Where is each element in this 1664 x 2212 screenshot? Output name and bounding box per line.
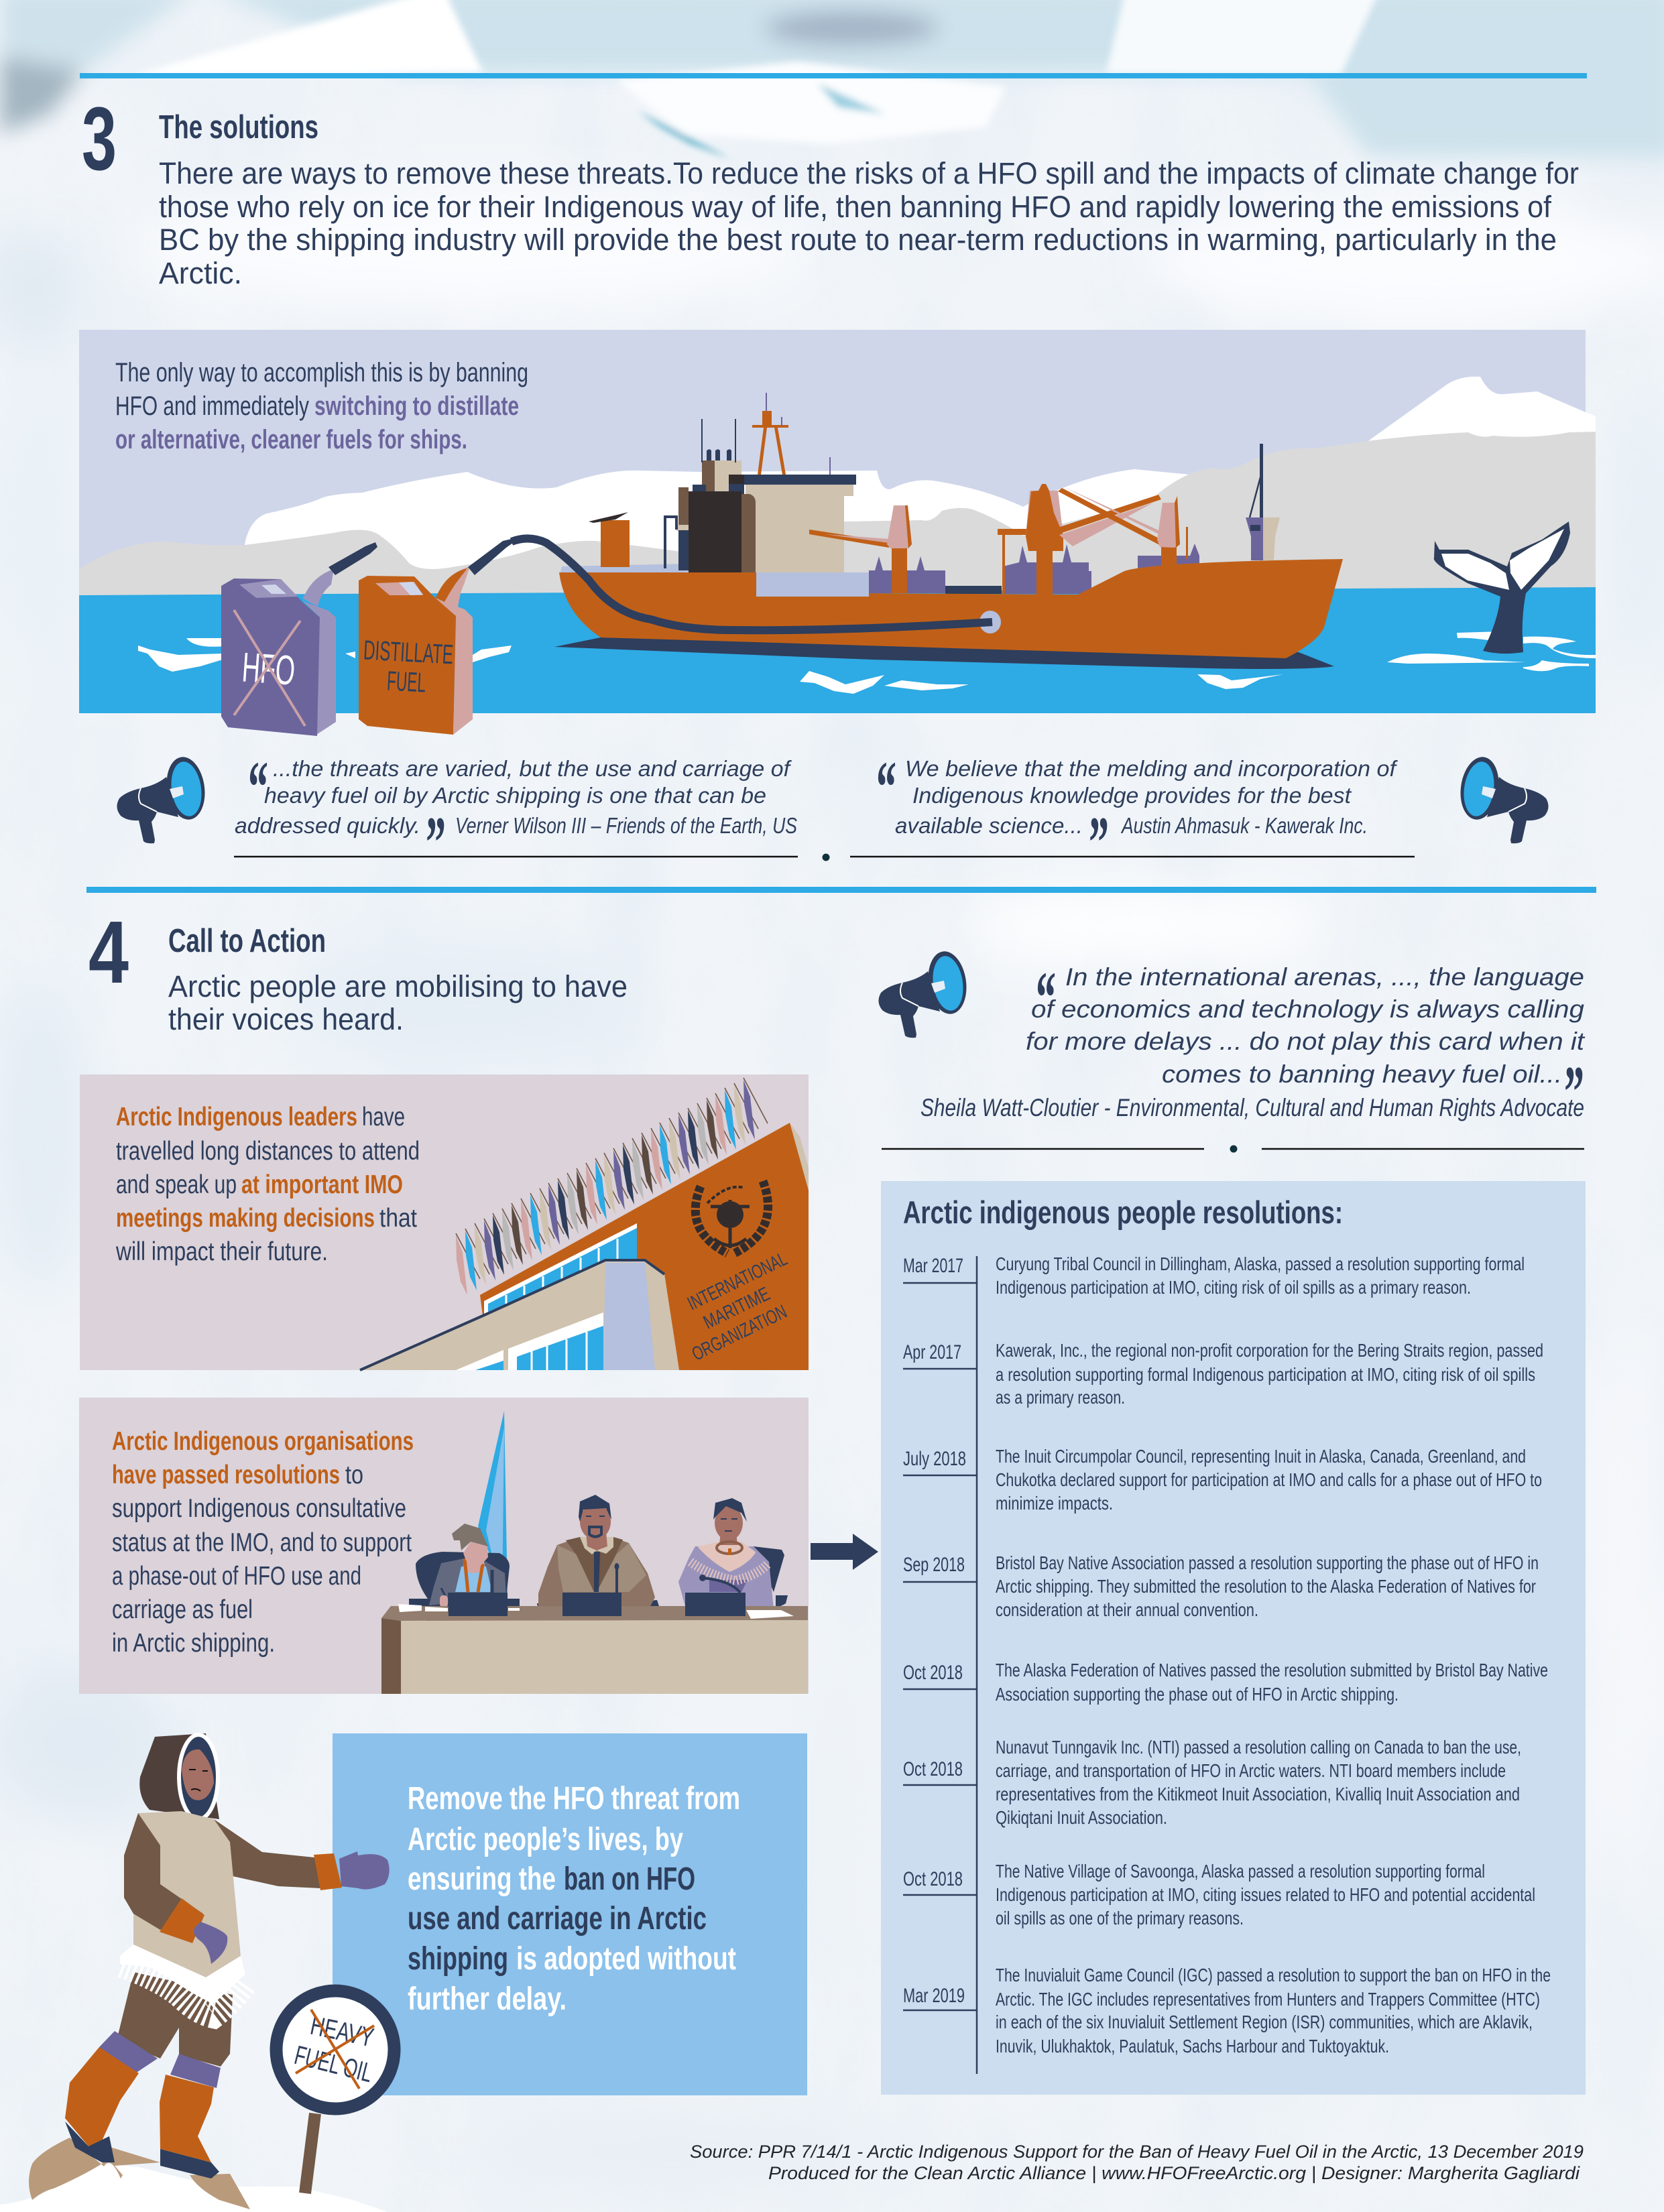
panel: Arctic indigenous people resolutions <box>881 1181 1586 2095</box>
icon: megaphone <box>117 755 209 843</box>
callout text <box>408 1781 740 2017</box>
cargo deck <box>869 570 945 593</box>
icon: megaphone <box>1457 755 1549 843</box>
timeline entries: minimize impacts. <box>996 1493 1113 1514</box>
quote 2 text: Austin Ahmasuk - Kawerak Inc. <box>1120 813 1368 838</box>
right arm <box>214 1819 320 1888</box>
quote 1 text: ” <box>426 802 446 883</box>
woman left <box>409 1524 520 1607</box>
panel: call to action callout <box>333 1733 807 2095</box>
quote 3 text: for more delays ... do not play this card when it <box>1026 1028 1586 1055</box>
quote 3 text: comes to banning heavy fuel oil... <box>1162 1060 1562 1088</box>
IMO panel text: Arctic Indigenous leaders <box>116 1103 357 1131</box>
callout text: ensuring the <box>408 1861 556 1897</box>
jerry can: HFO: HFO <box>241 644 296 694</box>
section 3 intro paragraph <box>159 156 1579 290</box>
mast <box>752 411 788 475</box>
resolutions panel text: status at the IMO, and to support <box>112 1528 412 1557</box>
microphone desks <box>448 1593 746 1616</box>
resolutions panel text: a phase-out of HFO use and <box>112 1562 361 1591</box>
section 3 intro paragraph: Arctic. <box>159 256 242 290</box>
callout text: use and carriage in Arctic <box>408 1901 707 1937</box>
callout text: shipping <box>408 1941 508 1977</box>
meeting illustration <box>381 1411 808 1694</box>
quote 3 text: of economics and technology is always calling <box>1031 995 1584 1023</box>
section 4 intro <box>168 969 628 1036</box>
resolutions panel text: support Indigenous consultative <box>112 1494 406 1523</box>
snow mountains <box>245 469 1220 576</box>
quote 1 text: Verner Wilson III – Friends of the Earth, US <box>455 813 797 838</box>
section 3 intro paragraph: BC by the shipping industry will provide the best route to near-term reductions in warming, particularly in the <box>159 223 1557 257</box>
IMO wordmark <box>685 1248 790 1365</box>
quote 1 text: ...the threats are varied, but the use and carriage of <box>273 756 792 781</box>
upper windows <box>484 1223 637 1314</box>
section 3 intro paragraph: those who rely on ice for their Indigenous way of life, then banning HFO and rapidly lowering the emissions of <box>159 190 1551 224</box>
timeline entries: Qikiqtani Inuit Association. <box>996 1807 1167 1828</box>
quote 2 text: ” <box>1089 802 1109 883</box>
timeline dates: Mar 2019 <box>903 1985 965 2007</box>
IMO emblem <box>695 1181 768 1253</box>
grey mountains <box>79 432 1596 603</box>
tunic <box>133 1811 241 1977</box>
funnel <box>601 520 630 567</box>
cranes <box>892 548 907 593</box>
quote 1 text: heavy fuel oil by Arctic shipping is one that can be <box>264 783 766 808</box>
IMO panel text <box>115 1103 420 1266</box>
whale tail <box>1434 521 1570 654</box>
fringe <box>120 1945 245 2014</box>
resolutions panel text: Arctic Indigenous organisations <box>112 1427 414 1456</box>
timeline dates: Sep 2018 <box>903 1554 965 1576</box>
superstructure <box>702 460 715 491</box>
IMO panel text: will impact their future. <box>115 1237 328 1266</box>
snow peak right <box>1341 377 1596 456</box>
IMO panel text: and speak up <box>116 1170 237 1199</box>
timeline entries: oil spills as one of the primary reasons. <box>996 1908 1244 1928</box>
quote 3 text: ” <box>1564 1051 1584 1133</box>
timeline dates: Apr 2017 <box>903 1341 961 1363</box>
resolutions panel text <box>112 1427 414 1658</box>
section 3 number: 3 <box>82 89 117 189</box>
resolutions panel text: have passed resolutions <box>112 1461 340 1489</box>
quote 2 text <box>876 746 1399 883</box>
jerry can: distillate fuel: DISTILLATE <box>363 635 454 670</box>
jerry can: distillate fuel: FUEL <box>386 666 426 698</box>
footer source and credits: Source: PPR 7/14/1 - Arctic Indigenous Support for the Ban of Heavy Fuel Oil in the Arctic, 13 December 2019 <box>690 2142 1584 2162</box>
IMO wordmark: ORGANIZATION <box>689 1301 790 1365</box>
quote 2 <box>876 746 1549 883</box>
timeline dates <box>903 1255 966 2007</box>
timeline entries: Inuvik, Ulukhaktok, Paulatuk, Sachs Harbour and Tuktoyaktuk. <box>996 2036 1389 2056</box>
timeline entries: carriage, and transportation of HFO in Arctic waters. NTI board members include <box>996 1760 1506 1781</box>
timeline dates: Oct 2018 <box>903 1662 963 1684</box>
resolutions panel text: carriage as fuel <box>112 1595 253 1624</box>
callout text: ban on HFO <box>564 1861 695 1897</box>
quote 3 text: “ <box>1036 957 1056 1038</box>
panel: IMO meetings <box>80 1074 809 1370</box>
sea <box>79 587 1596 713</box>
section 4 intro: Arctic people are mobilising to have <box>168 969 628 1003</box>
panel caption: The only way to accomplish this is by banning <box>115 358 528 387</box>
papers <box>398 1604 794 1619</box>
flag poles <box>456 1078 768 1279</box>
IMO wordmark: MARITIME <box>700 1283 774 1334</box>
callout text: Remove the HFO threat from <box>408 1781 740 1817</box>
leg bands <box>99 2031 158 2075</box>
panel: ship illustration <box>79 330 1596 736</box>
quote 2 text: We believe that the melding and incorporation of <box>905 756 1399 781</box>
quote 3 text: In the international arenas, ..., the language <box>1065 963 1584 991</box>
callout text: Arctic people’s lives, by <box>408 1822 683 1857</box>
panel caption: or alternative, cleaner fuels for ships. <box>115 425 467 454</box>
quote 3 text <box>920 957 1586 1133</box>
timeline entries: Association supporting the phase out of HFO in Arctic shipping. <box>996 1684 1399 1705</box>
stern deck <box>560 564 690 576</box>
timeline entries: representatives from the Kitikmeot Inuit Association, Kivalliq Inuit Association and <box>996 1784 1520 1804</box>
blue flag <box>478 1411 508 1597</box>
section divider middle <box>86 887 1596 893</box>
sign: heavy fuel oil banned <box>276 1991 394 2193</box>
ship shadow <box>554 637 1334 669</box>
timeline dates: Mar 2017 <box>903 1255 963 1277</box>
quote 1 text: “ <box>248 746 268 828</box>
snow ground <box>0 2164 388 2212</box>
sign: heavy fuel oil banned: HEAVY <box>308 2011 376 2053</box>
IMO panel text: have <box>362 1103 405 1131</box>
callout text: is adopted without <box>516 1941 736 1977</box>
resolutions panel text: to <box>345 1461 363 1489</box>
IMO building <box>360 1078 809 1370</box>
ship <box>554 393 1343 669</box>
quote 2 text: available science... <box>895 813 1083 838</box>
resolutions heading: Arctic indigenous people resolutions: <box>903 1194 1343 1230</box>
section 4 intro: their voices heard. <box>168 1002 404 1036</box>
IMO panel text: that <box>379 1204 417 1233</box>
quote 2 text: “ <box>876 746 896 828</box>
IMO panel text: travelled long distances to attend <box>116 1137 420 1166</box>
timeline dates: Oct 2018 <box>903 1758 963 1780</box>
timeline entries <box>996 1253 1551 2056</box>
legs <box>117 1972 233 2067</box>
left sleeve <box>124 1813 203 1930</box>
quote 1 text: addressed quickly. <box>235 813 420 838</box>
IMO wordmark: INTERNATIONAL <box>685 1248 790 1315</box>
tan boots fur <box>29 2138 250 2209</box>
jerry can: distillate fuel <box>359 539 513 735</box>
timeline dates: Oct 2018 <box>903 1868 963 1890</box>
timeline entries: as a primary reason. <box>996 1387 1125 1408</box>
panel caption <box>115 358 528 454</box>
section 3 heading: The solutions <box>159 109 318 145</box>
panel: resolutions meeting <box>79 1398 809 1694</box>
orange facade <box>790 1123 809 1190</box>
lower building <box>360 1262 679 1370</box>
footer source and credits: Produced for the Clean Arctic Alliance | www.HFOFreeArctic.org | Designer: Margherita Gagliardi <box>768 2163 1580 2183</box>
callout text: further delay. <box>408 1981 567 2017</box>
section 4 number: 4 <box>88 903 129 1001</box>
footer source and credits <box>690 2142 1584 2183</box>
sign: heavy fuel oil banned: FUEL OIL <box>292 2040 375 2088</box>
quote 1 <box>117 746 797 883</box>
fuel hose <box>512 538 992 630</box>
timeline entries: The Native Village of Savoonga, Alaska passed a resolution supporting formal <box>996 1861 1485 1882</box>
resolutions panel text: in Arctic shipping. <box>112 1629 275 1658</box>
desk <box>381 1606 808 1621</box>
jerry can: HFO <box>221 542 377 736</box>
quote 2 text: Indigenous knowledge provides for the best <box>912 783 1352 808</box>
timeline entries: Indigenous participation at IMO, citing risk of oil spills as a primary reason. <box>996 1277 1471 1298</box>
arrow to resolutions <box>811 1534 878 1570</box>
flags <box>456 1080 755 1295</box>
man center <box>537 1495 660 1612</box>
woman right <box>678 1498 788 1609</box>
IMO panel text: meetings making decisions <box>116 1204 375 1233</box>
panel caption: HFO and immediately <box>115 391 309 421</box>
waves <box>138 631 1596 694</box>
person in parka <box>29 1733 390 2209</box>
icon: megaphone <box>878 949 970 1038</box>
IMO panel text: at important IMO <box>241 1170 403 1199</box>
forward mast <box>1263 517 1280 560</box>
boots <box>65 2047 139 2146</box>
hood <box>139 1733 219 1819</box>
hull port <box>979 611 1001 633</box>
section 3 intro paragraph: There are ways to remove these threats.To reduce the risks of a HFO spill and the impacts of climate change for <box>159 156 1579 190</box>
timeline entries: consideration at their annual convention. <box>996 1599 1258 1620</box>
quote 3 <box>878 949 1586 1133</box>
panel caption: switching to distillate <box>314 391 519 421</box>
timeline rules <box>903 1256 977 2074</box>
section 4 heading: Call to Action <box>168 923 326 959</box>
section divider top <box>80 73 1587 78</box>
timeline dates: July 2018 <box>903 1448 966 1470</box>
quote 1 text <box>235 746 797 883</box>
hull <box>559 559 1343 658</box>
